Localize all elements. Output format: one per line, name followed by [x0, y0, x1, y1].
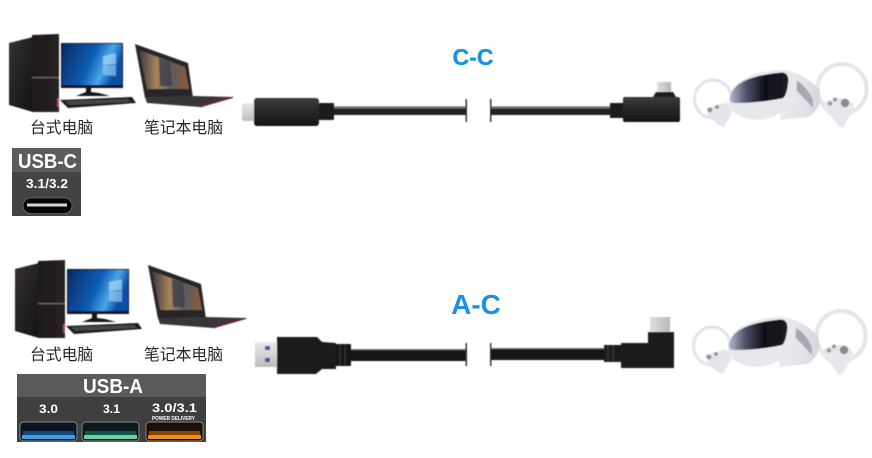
- icon: desktop computer: [9, 34, 136, 112]
- icon: desktop computer: [15, 260, 142, 338]
- icon: green USB 3.1 port: [82, 422, 139, 441]
- heading: A-C: A-C: [451, 289, 501, 320]
- icon: orange USB 3.0/3.1 power delivery port: [146, 422, 203, 441]
- port version: 3.1: 3.1: [103, 404, 121, 416]
- icon: laptop: [148, 265, 246, 328]
- icon: USB-A cable, left plug: [255, 337, 467, 374]
- label: laptop: 笔记本电脑: [144, 346, 223, 364]
- icon: VR headset with controllers: [694, 311, 866, 375]
- panel: A-C connection row: [15, 260, 866, 375]
- port version: 3.0/3.1: 3.0/3.1: [152, 403, 198, 415]
- label: desktop computer: 台式电脑: [30, 346, 93, 364]
- badge version: 3.1/3.2: [26, 177, 68, 191]
- badge: USB-A ports: [17, 374, 206, 442]
- label: laptop: 笔记本电脑: [144, 119, 223, 137]
- badge title: USB-C: [18, 150, 77, 173]
- label: desktop computer: 台式电脑: [30, 119, 93, 137]
- icon: VR headset with controllers: [694, 64, 866, 128]
- badge: USB-C 3.1/3.2 port: [12, 148, 81, 216]
- heading: C-C: C-C: [453, 44, 493, 70]
- icon: USB-C port: [23, 198, 72, 214]
- icon: USB-C cable, L-shaped plug: [490, 317, 674, 368]
- icon: laptop: [135, 44, 233, 108]
- icon: blue USB 3.0 port: [20, 422, 77, 441]
- port version: 3.0: 3.0: [39, 404, 58, 416]
- icon: USB-C cable, right-angle plug: [490, 82, 680, 122]
- badge title: USB-A: [83, 375, 143, 398]
- panel: C-C connection row: [9, 34, 866, 128]
- icon: USB-C cable, left plug: [242, 98, 467, 126]
- port note: power delivery: POWER DELIVERY: [152, 416, 196, 422]
